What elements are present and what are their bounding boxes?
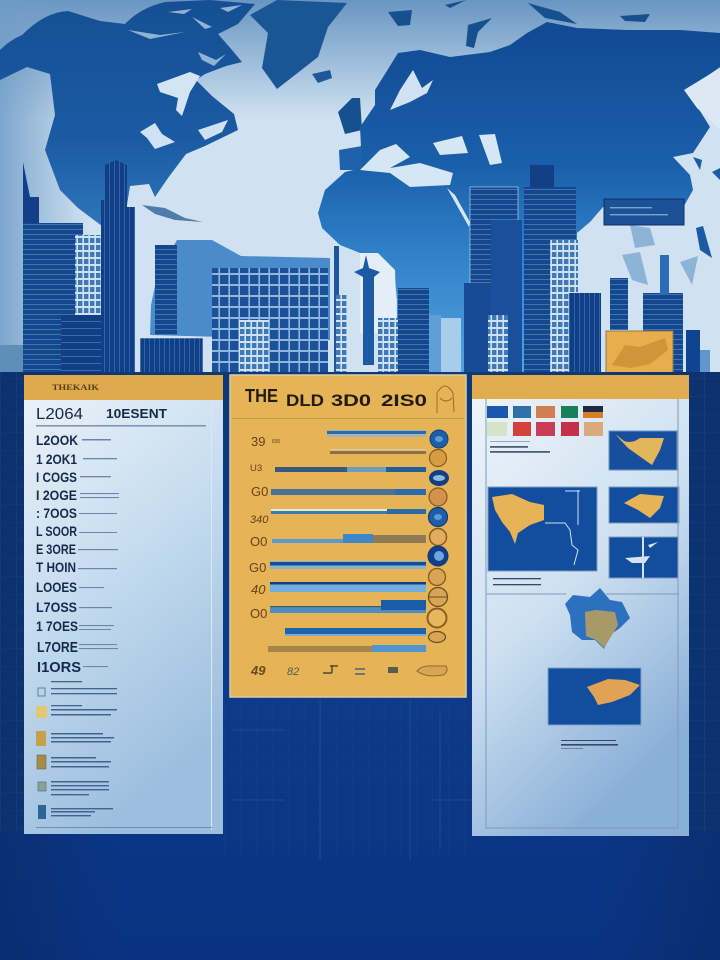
list descriptions [78, 439, 119, 667]
coin blue [430, 430, 448, 448]
frame lines [486, 399, 679, 828]
legend icon 5 [38, 782, 46, 791]
coin gold [430, 528, 446, 546]
column headings [36, 406, 167, 423]
bottom caption [561, 740, 618, 749]
map: mid small [609, 487, 679, 523]
panel: left list [24, 375, 223, 834]
building: mid-blue office [378, 288, 461, 373]
panel header [472, 375, 689, 399]
chart title [245, 386, 427, 410]
building: wide grid block [212, 268, 328, 373]
value labels: G0 [249, 560, 266, 575]
header label: THEKAIK [52, 382, 99, 392]
legend icon 1 [38, 688, 45, 696]
map: top small [609, 431, 677, 470]
map: Iceland [312, 70, 332, 83]
building: dark stripe block [569, 293, 601, 373]
legend icon 6 [38, 805, 46, 819]
year list: 1 2OK1 [36, 451, 77, 467]
map caption [493, 578, 541, 585]
map: Baltic [390, 70, 433, 110]
map: pale Alaska landmass [684, 68, 720, 130]
year list: LOOES [36, 579, 77, 595]
building: right towers [643, 255, 710, 375]
chart title: 2IS0 [381, 392, 427, 410]
map: pale African coast [360, 253, 397, 333]
map: bottom [548, 668, 641, 725]
bar 5 [271, 509, 426, 514]
coin blue [428, 546, 448, 566]
column headings: L2064 [36, 406, 83, 423]
bar 9 [270, 600, 426, 613]
bar chart [268, 430, 426, 652]
map: Hudson Bay [157, 72, 200, 116]
small yellow map card [606, 331, 673, 373]
building: thin tower [334, 246, 348, 373]
panel: right maps [472, 375, 689, 836]
bar 6 [272, 534, 426, 543]
swatch caption [490, 441, 550, 453]
chart title: THE [245, 386, 278, 406]
value labels: O0 [250, 606, 267, 621]
column headings: 10ESENT [106, 406, 167, 421]
value labels: 40 [251, 582, 266, 597]
map: South America [150, 240, 330, 340]
colour swatches [487, 406, 603, 436]
map: big [488, 487, 597, 571]
bar 2 [330, 449, 426, 454]
value labels: 830 [272, 439, 281, 445]
year list: I 2OGE [36, 487, 77, 503]
year list: L7OSS [36, 599, 77, 615]
coin gold [428, 588, 448, 606]
map: Southeast Asia seas [622, 225, 698, 285]
coin gold small [428, 632, 446, 642]
world map [0, 0, 720, 372]
map: Eurasia and Africa [318, 22, 720, 372]
map: Mediterranean [360, 144, 453, 187]
background sky [0, 0, 720, 375]
map: Novaya Zemlya [466, 18, 492, 48]
footer symbols: 49 [250, 663, 266, 678]
map: Arctic channels [128, 5, 242, 66]
year list: 1 7OES [36, 618, 78, 634]
building: spire left tower [0, 162, 101, 373]
bar 10 [285, 628, 426, 636]
map: Great Lakes [140, 120, 228, 149]
title icon [437, 386, 454, 413]
map: Caribbean [142, 205, 203, 222]
building: skyscraper right [524, 165, 578, 373]
year list: L SOOR [36, 523, 77, 539]
legend icon 4 [37, 755, 46, 769]
building: twin skyscraper left [464, 187, 522, 373]
map: Greenland [250, 0, 347, 89]
panel header [24, 375, 223, 400]
coin blue [429, 470, 449, 486]
legend icon 2 [36, 706, 47, 718]
map: lower small [609, 537, 678, 578]
sign panel [604, 199, 684, 225]
value labels: 39 [251, 434, 265, 449]
chart title: DLD [286, 392, 324, 410]
year list [36, 432, 81, 676]
chart title: 3D0 [331, 392, 371, 410]
city skyline [0, 160, 710, 375]
building: low block [140, 338, 203, 373]
bar 3 [275, 467, 426, 472]
building: tower with observation deck [354, 255, 380, 365]
panel: center bars [230, 375, 466, 697]
circle icons [428, 430, 449, 642]
map: UK [338, 98, 362, 134]
coin gold [429, 488, 447, 506]
coin blue [428, 508, 448, 526]
map: Caspian Sea [479, 134, 502, 165]
bar 1 [327, 430, 426, 437]
value labels: 340 [250, 514, 269, 526]
legend icon 3 [36, 731, 46, 746]
map: Iberia [339, 146, 362, 170]
building: mid tower [155, 245, 177, 335]
map: Black Sea [433, 136, 468, 155]
value labels [249, 434, 281, 621]
bar 7 [270, 561, 426, 569]
value labels: O0 [250, 534, 267, 549]
coin gold ring [428, 608, 446, 628]
coin gold [428, 568, 446, 586]
bar 11 [268, 645, 426, 652]
footer symbols: 82 [287, 666, 299, 678]
year list: I1ORS [37, 659, 81, 676]
year list: L7ORE [37, 639, 78, 656]
value labels: G0 [251, 484, 268, 499]
building: tall dark tower [101, 160, 135, 372]
building: crane tower [610, 278, 628, 330]
year list: E 3ORE [36, 541, 76, 557]
year list: L2OOK [36, 432, 78, 448]
value labels: U3 [250, 463, 262, 474]
year list: T HOIN [36, 559, 76, 575]
region blob map [565, 588, 630, 649]
dark lower city background [0, 372, 720, 960]
year list: : 7OOS [36, 505, 77, 521]
map: Arctic islands [388, 0, 650, 26]
map: North America [0, 0, 255, 226]
year list: I COGS [36, 469, 77, 485]
bar 8 [270, 582, 426, 592]
coin gold [430, 450, 446, 466]
map: Sakhalin and Japan [693, 157, 720, 258]
bar 4 [271, 489, 426, 495]
legend text [51, 681, 117, 816]
map: Red Sea [447, 188, 470, 227]
footer symbols [250, 663, 447, 678]
